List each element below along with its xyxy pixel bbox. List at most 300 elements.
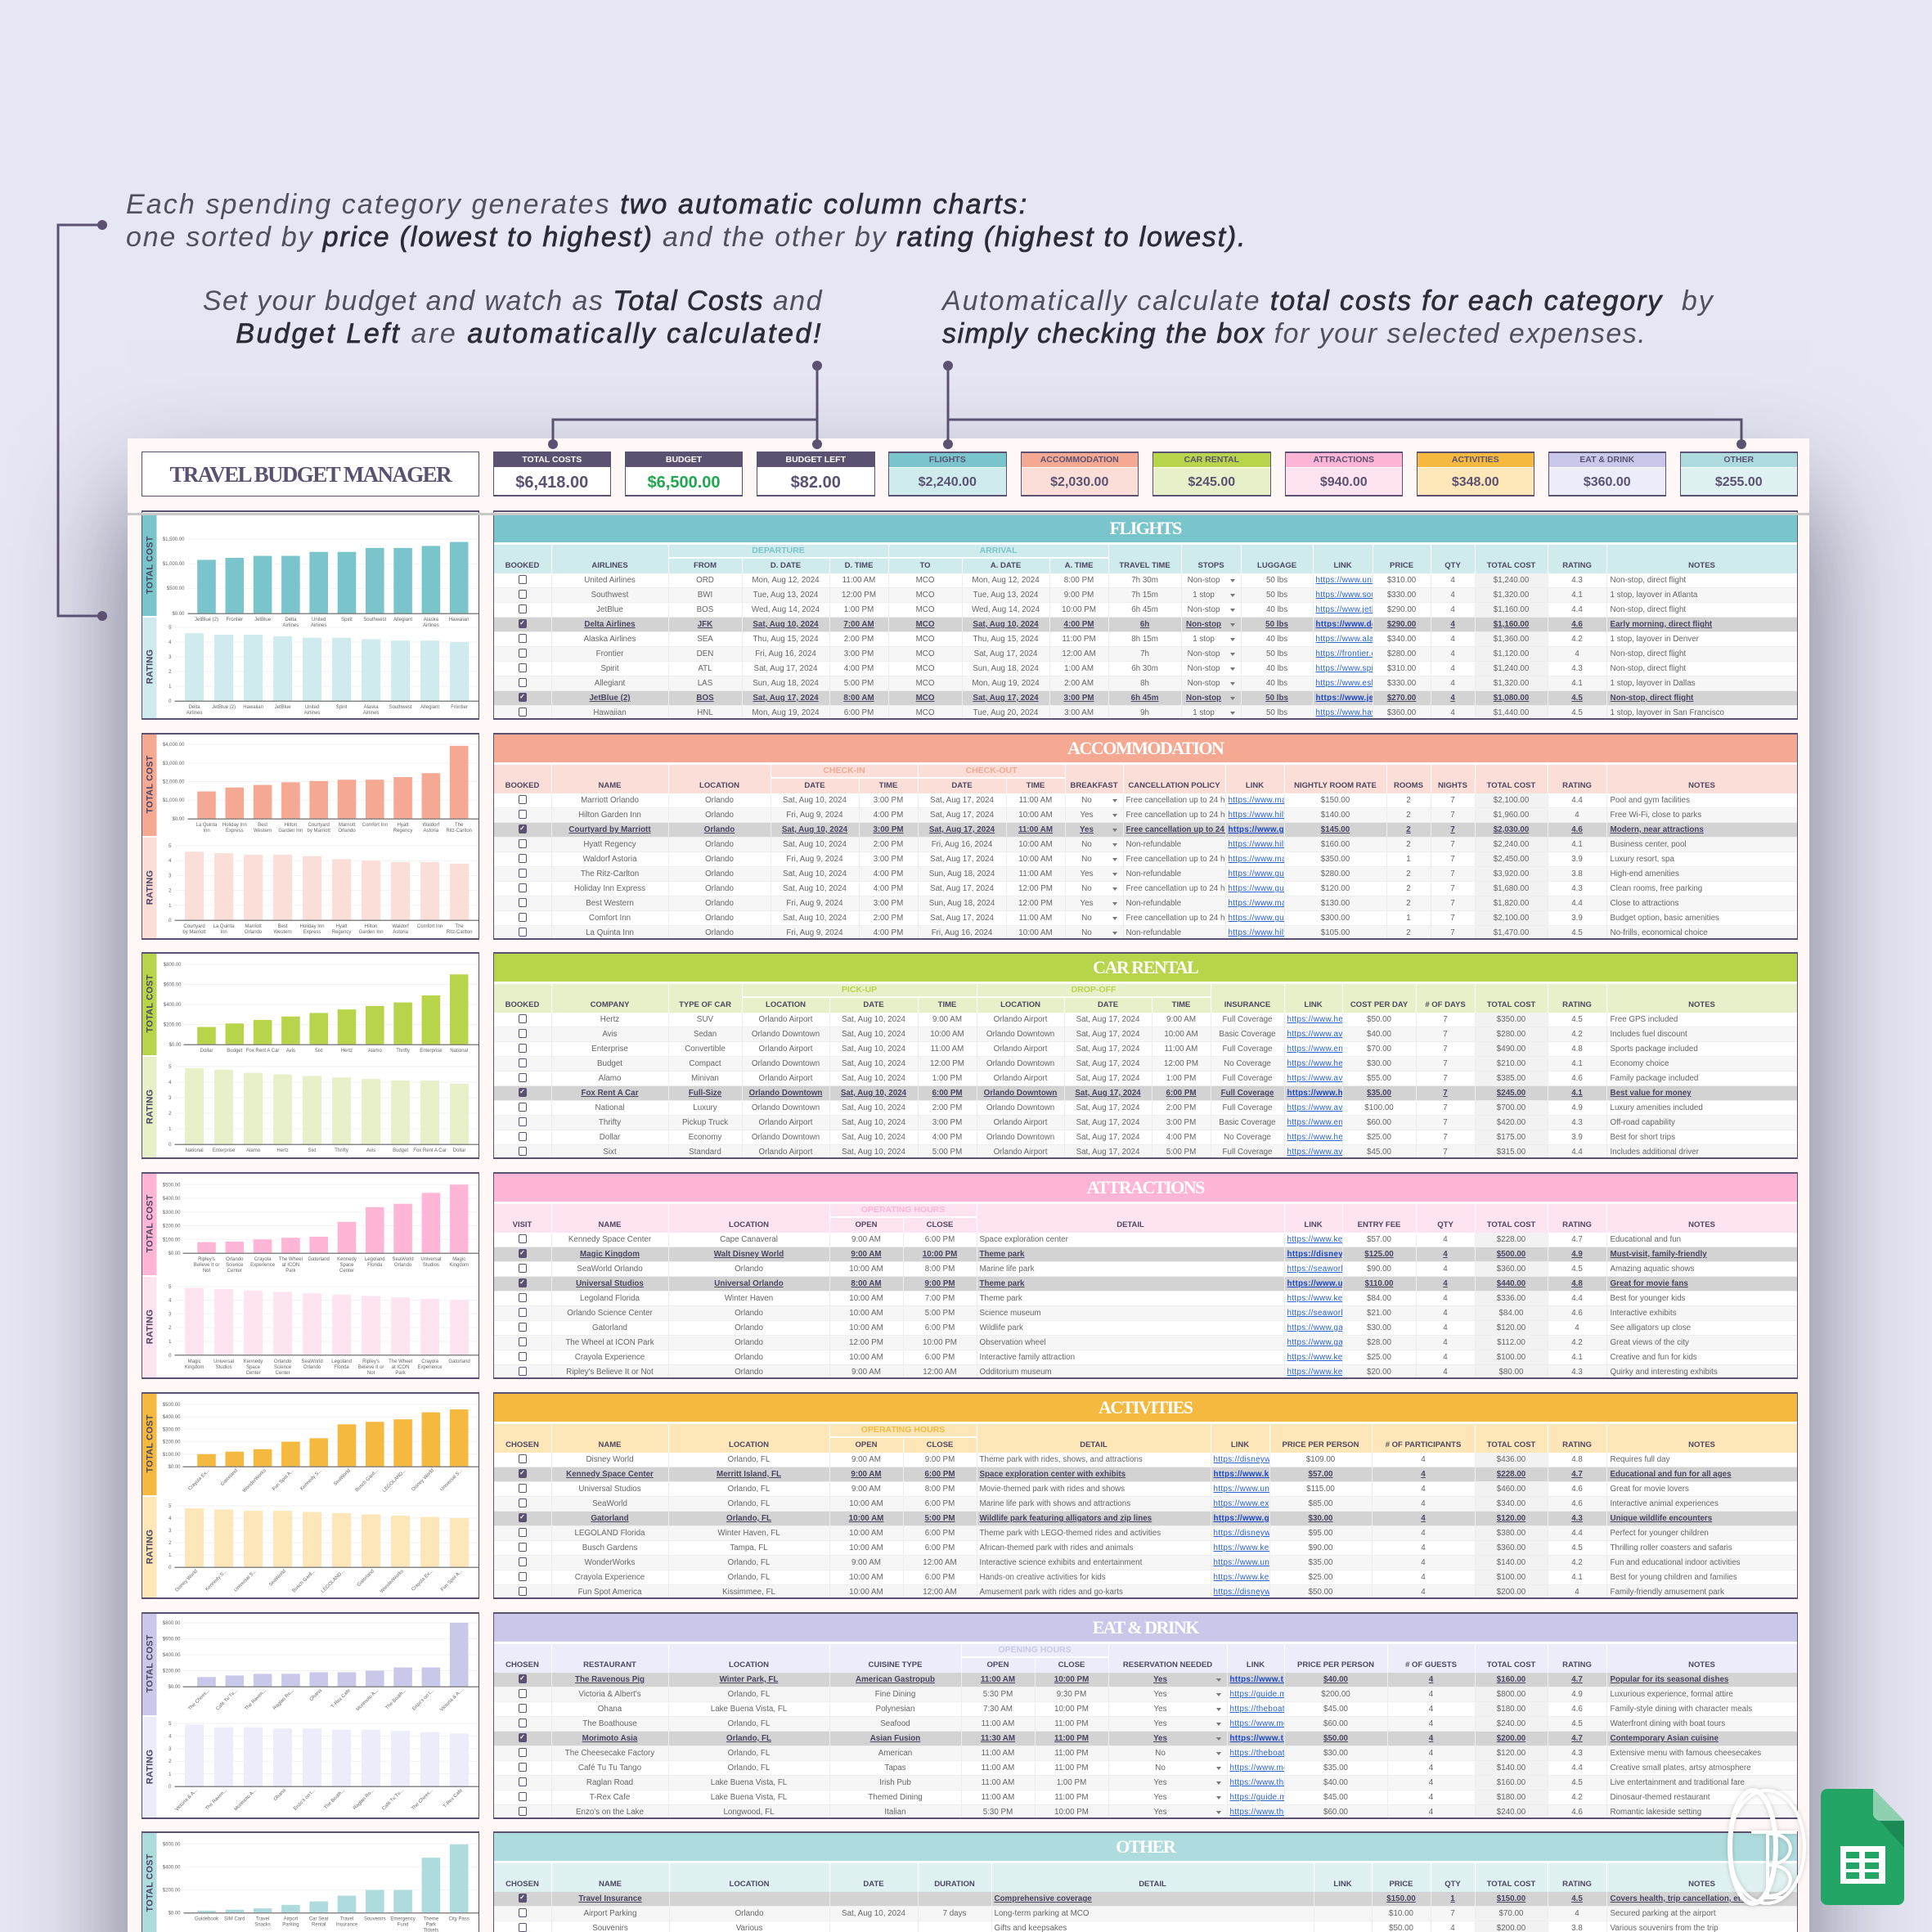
table: car rental data: 12:00 PM	[930, 1059, 964, 1068]
table: eat and drink data: RATING	[1562, 1660, 1592, 1669]
chart panel: activities: Fun Spot A...	[440, 1569, 464, 1593]
table: eat and drink data: 4.2	[1571, 1793, 1583, 1802]
table: flights data: 4:00 PM	[844, 664, 874, 673]
table: eat and drink data: 11:00 PM	[1054, 1749, 1089, 1758]
table: eat and drink data: $800.00	[1497, 1690, 1525, 1699]
table: flights data: QTY	[1445, 561, 1461, 570]
table: flights data: 4	[1450, 679, 1455, 688]
table: flights data: 4	[1450, 635, 1455, 644]
table: flights data: $1,160.00	[1494, 605, 1529, 614]
table: car rental data: Full-Size	[689, 1089, 721, 1098]
table: car rental data: Orlando Downtown	[752, 1133, 820, 1142]
table: activities data: 4	[1421, 1529, 1426, 1538]
table: car rental data: $40.00	[1367, 1030, 1391, 1039]
table: accommodation data: No	[1081, 914, 1092, 923]
table: flights data: Non-stop	[1188, 649, 1220, 658]
table: activities data: Unique wildlife encounters	[1611, 1514, 1712, 1523]
chart panel: activities: RATING	[145, 1530, 155, 1564]
table: flights data: $290.00	[1387, 605, 1416, 614]
table: accommodation data: $160.00	[1321, 840, 1350, 849]
table: car rental data: Sat, Aug 17, 2024	[1076, 1118, 1139, 1127]
table: accommodation data: DATE	[951, 781, 973, 790]
chart panel: attractions: Studios	[215, 1365, 231, 1370]
table: flights data: 4.2	[1571, 635, 1583, 644]
table: car rental data: # OF DAYS	[1425, 1000, 1466, 1009]
chart panel: car rental: Sixt	[314, 1049, 323, 1054]
table: flights data: 7h	[1140, 649, 1149, 658]
chart panel: car rental: $200.00	[163, 1022, 182, 1027]
table: car rental data: Alamo	[599, 1074, 621, 1083]
table: attractions data: $120.00	[1497, 1323, 1525, 1332]
chart panel: attractions: Crayola	[421, 1359, 438, 1364]
chart panel: eat and drink: Enzo's on t...	[411, 1688, 435, 1712]
table: accommodation data: 3.9	[1571, 914, 1583, 923]
chart panel: attractions: SeaWorld	[392, 1257, 413, 1262]
table: flights data: 1 stop	[1193, 635, 1215, 644]
chart panel: activities: Crayola Ex...	[187, 1468, 211, 1492]
table: car rental data: 4.9	[1571, 1103, 1583, 1112]
chart panel: flights: JetBlue	[254, 618, 271, 622]
chart panel: activities: Universal S...	[439, 1468, 464, 1493]
table: activities data: 4.4	[1571, 1529, 1583, 1538]
table: flights data: 1:00 PM	[844, 605, 874, 614]
table: eat and drink data: $50.00	[1323, 1734, 1348, 1743]
table: flights data: Allegiant	[595, 679, 625, 688]
table: flights data: Mon, Aug 19, 2024	[972, 679, 1040, 688]
table: other data: $10.00	[1389, 1909, 1413, 1918]
table: car rental data: Sixt	[603, 1148, 617, 1157]
chart panel: other: Insurance	[335, 1923, 357, 1928]
table: car rental data: Full Coverage	[1223, 1074, 1273, 1083]
table: eat and drink data: Morimoto Asia	[582, 1734, 637, 1743]
chart panel: accommodation: Orlando	[244, 930, 262, 935]
table: car rental data: ✓	[519, 1088, 525, 1095]
table: flights data: ARRIVAL	[980, 546, 1017, 555]
chart panel: car rental: Sixt	[308, 1148, 316, 1153]
table: car rental data: $385.00	[1497, 1074, 1525, 1083]
kpi: flights: $2,240.00	[919, 474, 977, 489]
chart panel: accommodation: Holiday Inn	[299, 924, 324, 929]
table: accommodation data: $1,680.00	[1494, 884, 1529, 893]
chart panel: attractions: Kingdom	[184, 1365, 204, 1370]
table: activities data: Orlando, FL	[728, 1485, 770, 1494]
table: attractions data: 9:00 AM	[851, 1250, 882, 1259]
table: activities data: 4	[1421, 1455, 1426, 1464]
chart panel: activities: LEGOLAND...	[321, 1569, 346, 1594]
chart panel: accommodation: Garden Inn	[278, 829, 303, 833]
table: flights data: Wed, Aug 14, 2024	[752, 605, 820, 614]
table: flights data: NOTES	[1688, 561, 1715, 570]
table: attractions data: Theme park	[980, 1279, 1025, 1288]
table: accommodation data: Fri, Aug 9, 2024	[786, 811, 843, 820]
table: attractions data: SeaWorld Orlando	[577, 1265, 643, 1274]
chart panel: accommodation: Marriott	[245, 924, 261, 929]
table: car rental data: DATE	[1098, 1000, 1118, 1009]
table: activities data: 8:00 PM	[925, 1485, 955, 1494]
chart panel: eat and drink: 4	[168, 1734, 172, 1739]
table: other data: TOTAL COST	[1487, 1880, 1535, 1889]
table: accommodation data: 3:00 PM	[874, 899, 903, 908]
table: eat and drink data: Orlando, FL	[728, 1690, 770, 1699]
table: flights data: 4.6	[1571, 620, 1583, 629]
table: flights data: 8:00 PM	[1064, 576, 1094, 585]
table: car rental data: Orlando Airport	[994, 1045, 1047, 1054]
table: eat and drink data: Lake Buena Vista, FL	[711, 1705, 787, 1714]
table: activities data: $140.00	[1497, 1558, 1525, 1567]
table: attractions data: Walt Disney World	[714, 1250, 784, 1259]
chart panel: attractions: Orlando	[303, 1365, 321, 1370]
table: activities data: African-themed park with rides and animals	[980, 1543, 1133, 1552]
chart panel: attractions: Not	[202, 1269, 210, 1274]
table: car rental data: Orlando Downtown	[986, 1133, 1054, 1142]
table: flights data: MCO	[916, 694, 934, 703]
table: attractions data	[494, 1204, 1797, 1377]
table: accommodation data: 4:00 PM	[874, 869, 903, 878]
table: attractions data: $112.00	[1497, 1338, 1525, 1347]
table: car rental data: $60.00	[1367, 1118, 1391, 1127]
table: accommodation data: TIME	[1027, 781, 1045, 790]
table: attractions data: Cape Canaveral	[720, 1235, 778, 1244]
chart panel: car rental: $800.00	[163, 963, 182, 968]
chart panel: activities: Disney World	[411, 1468, 434, 1493]
chart panel: activities: SeaWorld	[268, 1569, 286, 1588]
table: eat and drink data: LOCATION	[729, 1660, 769, 1669]
table: flights data: Thu, Aug 15, 2024	[973, 635, 1039, 644]
chart panel: other: Rental	[312, 1923, 326, 1928]
table: accommodation data: Orlando	[705, 914, 734, 923]
table: accommodation data: $2,030.00	[1494, 825, 1529, 834]
table: flights data: 6h 45m	[1131, 694, 1158, 703]
table: activities data: Gatorland	[591, 1514, 629, 1523]
chart panel: attractions	[141, 1172, 479, 1379]
table: car rental data: 7	[1443, 1045, 1448, 1054]
chart panel: other: Airport	[283, 1917, 298, 1922]
table: activities data: 4.2	[1571, 1558, 1583, 1567]
table: eat and drink data: $140.00	[1497, 1764, 1525, 1772]
chart panel: accommodation: by Marriott	[182, 930, 206, 935]
table: activities data: $90.00	[1309, 1543, 1333, 1552]
chart panel: attractions: Believe It or	[357, 1365, 384, 1370]
table: flights data: TOTAL COST	[1487, 561, 1535, 570]
chart panel: accommodation: 3	[168, 874, 172, 878]
table: activities data: 6:00 PM	[925, 1499, 955, 1508]
kpi: budget: $6,500.00	[648, 473, 721, 491]
table: car rental data: Sat, Aug 17, 2024	[1076, 1148, 1139, 1157]
table: accommodation data: No	[1081, 928, 1092, 937]
table: flights data: 2:00 PM	[844, 635, 874, 644]
table: eat and drink data: 4	[1429, 1719, 1433, 1728]
table: flights data: BOOKED	[505, 561, 539, 570]
table: car rental data: DROP-OFF	[1072, 985, 1116, 995]
table: activities data: Orlando, FL	[728, 1455, 770, 1464]
kpi: other: $255.00	[1715, 474, 1763, 489]
table: car rental data: $50.00	[1367, 1015, 1391, 1024]
table: activities data: 4.1	[1571, 1573, 1583, 1582]
chart panel: activities: Gatorland	[220, 1468, 238, 1487]
table: flights data: 6h 30m	[1131, 664, 1158, 673]
chart panel: car rental: Enterprise	[212, 1148, 235, 1153]
table: flights data: $1,080.00	[1494, 694, 1529, 703]
table: car rental data: $35.00	[1367, 1089, 1391, 1098]
table: other data: Covers health, trip cancellation, etc.	[1610, 1894, 1747, 1903]
table: eat and drink data: 11:00 PM	[1054, 1719, 1089, 1728]
table: car rental data: 12:00 PM	[1164, 1059, 1198, 1068]
table: accommodation data: $2,100.00	[1494, 796, 1529, 805]
chart panel: other: Theme	[423, 1917, 438, 1922]
table: flights data: 3:00 PM	[1064, 694, 1094, 703]
table: car rental data: Orlando Airport	[994, 1118, 1047, 1127]
table: flights data: 4.5	[1571, 694, 1583, 703]
table: car rental data: Enterprise	[591, 1045, 628, 1054]
chart panel: other: Parking	[282, 1923, 299, 1928]
table: eat and drink data: $40.00	[1323, 1675, 1348, 1684]
chart panel: eat and drink: RATING	[145, 1750, 155, 1784]
table: accommodation data: Hilton Garden Inn	[578, 811, 641, 820]
kpi: other	[1680, 452, 1798, 496]
chart panel: car rental: Budget	[393, 1148, 408, 1153]
chart panel: eat and drink	[141, 1612, 479, 1819]
table: activities data: Universal Studios	[578, 1485, 641, 1494]
table: car rental data: Orlando Downtown	[986, 1030, 1054, 1039]
chart panel: car rental: Thrifty	[396, 1049, 409, 1054]
table: accommodation data: 2:00 PM	[874, 840, 903, 849]
table: car rental data: 4.5	[1571, 1015, 1583, 1024]
table: eat and drink data: 4.7	[1571, 1734, 1583, 1743]
table: flights data: $330.00	[1387, 591, 1416, 600]
table: accommodation data: Best Western	[586, 899, 634, 908]
table: car rental data: 5:00 PM	[1166, 1148, 1196, 1157]
chart panel: attractions: Crayola	[254, 1257, 271, 1262]
table: activities data: $85.00	[1309, 1499, 1333, 1508]
table: attractions data: 9:00 PM	[924, 1279, 955, 1288]
table: eat and drink data: 4.6	[1571, 1705, 1583, 1714]
table: accommodation data: 3:00 PM	[873, 825, 904, 834]
chart panel: accommodation: Holiday Inn	[222, 823, 246, 828]
table: eat and drink data: CHOSEN	[505, 1660, 539, 1669]
table: eat and drink data: $180.00	[1497, 1793, 1525, 1802]
table: car rental data: Family package included	[1611, 1074, 1698, 1083]
table: attractions data: $25.00	[1367, 1353, 1391, 1362]
table: attractions data: 4.5	[1571, 1265, 1583, 1274]
chart panel: accommodation: Garden Inn	[358, 930, 383, 935]
icon: google sheets	[1821, 1789, 1904, 1905]
table: car rental data: Full Coverage	[1223, 1148, 1273, 1157]
chart panel: flights: JetBlue	[274, 705, 291, 710]
table: flights data: 40 lbs	[1266, 635, 1287, 644]
chart panel: flights: Frontier	[226, 618, 243, 622]
chart panel: car rental: Fox Rent A Car	[413, 1148, 446, 1153]
table: accommodation data: Budget option, basic amenities	[1610, 914, 1719, 923]
table: activities data: 12:00 AM	[923, 1588, 957, 1597]
table: car rental data: $700.00	[1497, 1103, 1525, 1112]
table: attractions data: Crayola Experience	[575, 1353, 645, 1362]
chart panel: eat and drink: Victoria & A...	[439, 1688, 464, 1713]
table: accommodation data: 4	[1575, 811, 1579, 820]
table: flights data: DEPARTURE	[752, 546, 805, 555]
chart panel: accommodation: Best	[258, 823, 267, 828]
table: flights data: DEN	[697, 649, 713, 658]
table: activities data: 4	[1421, 1485, 1426, 1494]
table: accommodation data: 3.9	[1571, 855, 1583, 864]
table: eat and drink data: 10:00 PM	[1054, 1705, 1089, 1714]
table: other data: Comprehensive coverage	[995, 1894, 1092, 1903]
table: attractions data: $57.00	[1367, 1235, 1391, 1244]
table: accommodation data: 4.5	[1571, 928, 1583, 937]
table: car rental data: TOTAL COST	[1487, 1000, 1535, 1009]
chart panel: eat and drink: Morimoto A...	[233, 1788, 258, 1812]
table: eat and drink data: 4	[1429, 1764, 1433, 1772]
table: activities data: $50.00	[1309, 1588, 1333, 1597]
table: eat and drink data: Winter Park, FL	[720, 1675, 778, 1684]
table: accommodation data: $2,450.00	[1494, 855, 1529, 864]
table: accommodation data: 7	[1450, 899, 1455, 908]
table: car rental data: 4.1	[1571, 1089, 1583, 1098]
chart panel: attractions: TOTAL COST	[145, 1194, 155, 1253]
table: flights data: $1,440.00	[1494, 708, 1529, 717]
table: attractions data: ✓	[519, 1249, 525, 1256]
table: eat and drink data: The Cheesecake Factory	[565, 1749, 654, 1758]
table: eat and drink data: Live entertainment and traditional fare	[1611, 1778, 1745, 1787]
table: flights data: $310.00	[1387, 664, 1416, 673]
chart panel: attractions: Believe It or	[193, 1263, 219, 1268]
chart panel: flights: Delta	[285, 618, 296, 622]
table: flights data: 4.4	[1571, 605, 1583, 614]
table: accommodation data: 7	[1450, 811, 1455, 820]
chart panel: activities	[141, 1392, 479, 1599]
table: flights data: A. TIME	[1065, 561, 1093, 570]
table: eat and drink data: NOTES	[1688, 1660, 1715, 1669]
table: eat and drink data: 7:30 AM	[983, 1705, 1013, 1714]
chart panel: activities: $0.00	[168, 1465, 181, 1470]
table: car rental data: $315.00	[1497, 1148, 1525, 1157]
chart panel: accommodation: $3,000.00	[162, 762, 185, 766]
chart panel: flights: Frontier	[451, 705, 467, 710]
table: attractions data: The Wheel at ICON Park	[565, 1338, 654, 1347]
kpi: car rental: CAR RENTAL	[1184, 455, 1239, 465]
chart panel: accommodation: RATING	[145, 870, 155, 905]
kpi: other: OTHER	[1723, 455, 1754, 465]
chart panel: accommodation: Ritz-Carlton	[446, 829, 472, 833]
chart panel: eat and drink: Café Tu Tu...	[381, 1788, 405, 1812]
table: attractions data: TOTAL COST	[1487, 1220, 1535, 1229]
chart panel: car rental: 3	[168, 1096, 172, 1101]
table: activities data: TOTAL COST	[1487, 1440, 1535, 1449]
table: attractions data: OPEN	[856, 1220, 877, 1229]
table: activities data: 9:00 AM	[851, 1558, 881, 1567]
table: car rental data: 7	[1443, 1103, 1448, 1112]
table: attractions data: $125.00	[1364, 1250, 1394, 1259]
table: attractions data: NAME	[599, 1220, 621, 1229]
table: eat and drink data: $200.00	[1497, 1734, 1525, 1743]
table: flights data: MCO	[916, 679, 934, 688]
table: flights data: Non-stop, direct flight	[1611, 576, 1686, 585]
table: attractions data: Theme park	[980, 1250, 1025, 1259]
table: accommodation data: BOOKED	[505, 781, 539, 790]
table: attractions data: Universal Orlando	[714, 1279, 784, 1288]
table: flights data: Mon, Aug 12, 2024	[752, 576, 820, 585]
chart panel: attractions: Center	[339, 1269, 354, 1274]
table: activities data: Wildlife park featuring alligators and zip lines	[980, 1514, 1152, 1523]
table: car rental data: Orlando Airport	[759, 1015, 812, 1024]
callout: total costs	[941, 285, 1714, 349]
table: eat and drink data: Waterfront dining with boat tours	[1611, 1719, 1725, 1728]
table panel: car rental	[492, 952, 1798, 1159]
table: car rental data: Sat, Aug 17, 2024	[1076, 1030, 1139, 1039]
table: car rental data: $245.00	[1497, 1089, 1525, 1098]
chart panel: other: Guidebook	[194, 1917, 219, 1922]
table: car rental data: 4.4	[1571, 1148, 1583, 1157]
table: car rental data: Full Coverage	[1221, 1089, 1274, 1098]
table: flights data: 1 stop, layover in Dallas	[1611, 679, 1696, 688]
table: eat and drink data: 11:00 PM	[1054, 1764, 1089, 1772]
table: accommodation data: Sun, Aug 18, 2024	[929, 899, 995, 908]
title: travel budget manager: TRAVEL BUDGET MANAGER	[170, 462, 451, 487]
table: accommodation data: Sat, Aug 10, 2024	[783, 884, 847, 893]
table: activities data: Perfect for younger children	[1611, 1529, 1709, 1538]
table: activities data: Requires full day	[1611, 1455, 1670, 1464]
table: car rental data: 10:00 AM	[930, 1030, 964, 1039]
table: flights data	[494, 545, 1797, 718]
table: attractions data: Orlando	[735, 1323, 763, 1332]
table: flights data: 4.3	[1571, 576, 1583, 585]
table: other data: NAME	[599, 1880, 622, 1889]
chart panel: other: $200.00	[162, 1889, 181, 1894]
table: other data: 1	[1450, 1894, 1455, 1903]
table: attractions data: NOTES	[1688, 1220, 1715, 1229]
table: car rental data: Basic Coverage	[1219, 1030, 1276, 1039]
table: flights data: $1,240.00	[1494, 664, 1529, 673]
table: flights data: 3:00 PM	[844, 649, 874, 658]
table: eat and drink data: Polynesian	[876, 1705, 914, 1714]
table: accommodation data: Marriott Orlando	[581, 796, 639, 805]
table: car rental data: 1:00 PM	[1166, 1074, 1196, 1083]
table: accommodation data: 10:00 AM	[1018, 811, 1053, 820]
kpi: car rental: $245.00	[1188, 474, 1235, 489]
table: car rental data: 7	[1443, 1030, 1448, 1039]
table: flights data: Non-stop, direct flight	[1611, 694, 1693, 703]
table: eat and drink data: TOTAL COST	[1487, 1660, 1535, 1669]
table: car rental data: 4.2	[1571, 1030, 1583, 1039]
table: eat and drink data: Lake Buena Vista, FL	[711, 1778, 787, 1787]
table: car rental data: Sports package included	[1611, 1045, 1698, 1054]
table: attractions data: 6:00 PM	[925, 1323, 955, 1332]
chart panel: flights: Southwest	[363, 618, 386, 622]
table: accommodation data: Sat, Aug 10, 2024	[783, 914, 847, 923]
table: attractions data: LINK	[1304, 1220, 1323, 1229]
chart panel: attractions: Space	[246, 1365, 260, 1370]
table: accommodation data: BREAKFAST	[1070, 781, 1118, 790]
chart panel: other: $400.00	[162, 1865, 181, 1870]
table: accommodation data: Holiday Inn Express	[574, 884, 645, 893]
table: eat and drink data: Raglan Road	[586, 1778, 633, 1787]
table: flights data: 11:00 PM	[1062, 635, 1096, 644]
chart panel: activities: $100.00	[162, 1453, 181, 1458]
table: attractions data: 10:00 PM	[923, 1338, 957, 1347]
table: accommodation data: Sat, Aug 17, 2024	[929, 825, 995, 834]
table: flights data: 40 lbs	[1266, 605, 1287, 614]
table: flights data: 4	[1450, 649, 1455, 658]
table: car rental data: 4:00 PM	[932, 1133, 962, 1142]
table: activities data: 4	[1421, 1543, 1426, 1552]
table: eat and drink data: Longwood, FL	[723, 1808, 775, 1817]
table: flights data: MCO	[916, 620, 934, 629]
table: flights data: 40 lbs	[1266, 679, 1287, 688]
table: attractions data: 8:00 AM	[851, 1279, 882, 1288]
table: eat and drink data: Contemporary Asian cuisine	[1611, 1734, 1719, 1743]
table: attractions data: QTY	[1437, 1220, 1453, 1229]
chart panel: attractions: Gatorland	[448, 1359, 470, 1364]
table: accommodation data: Sat, Aug 10, 2024	[783, 796, 847, 805]
